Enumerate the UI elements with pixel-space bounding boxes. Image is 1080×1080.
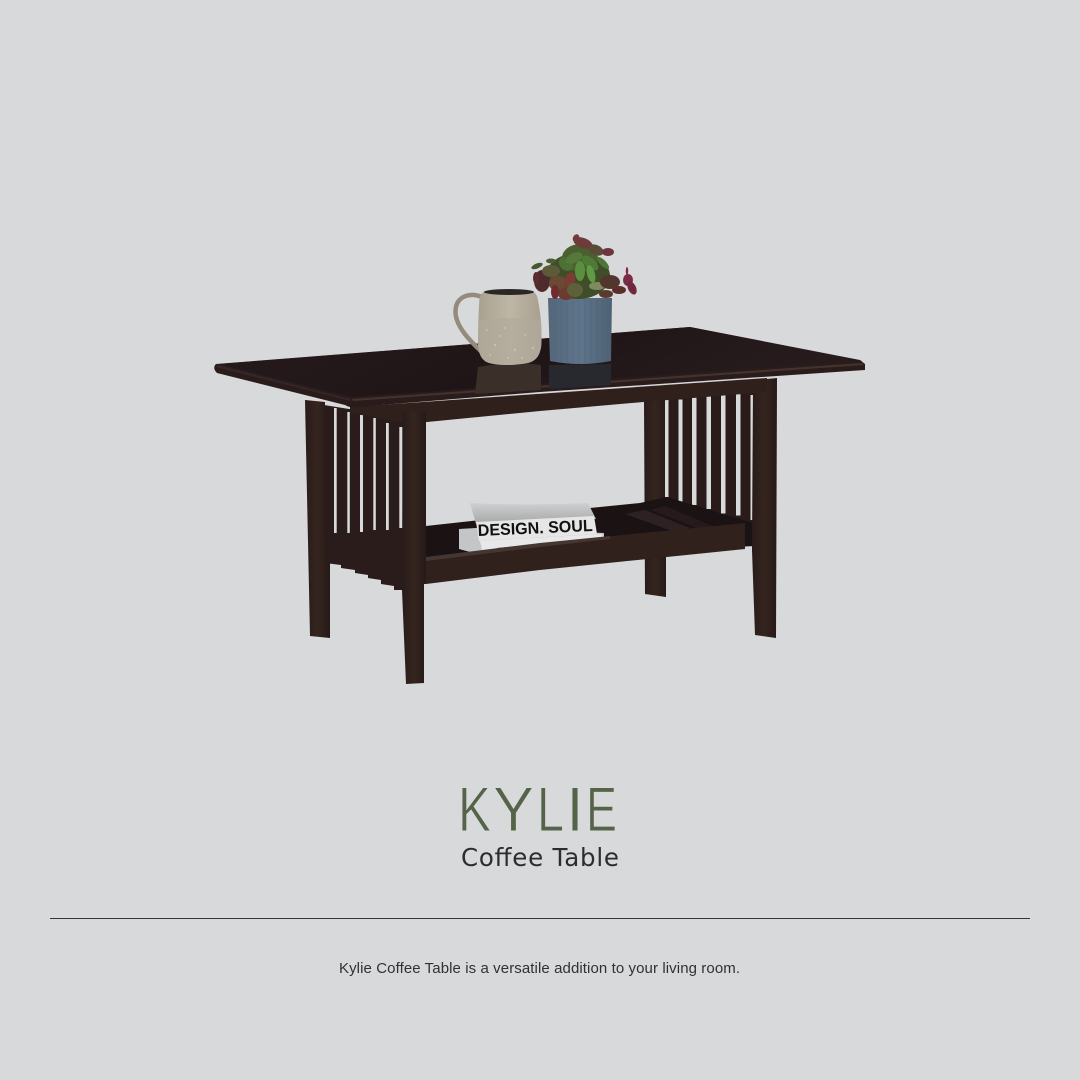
product name: K [458,775,491,845]
front apron [350,378,767,424]
divider [50,918,1030,919]
front right leg [752,378,777,638]
mug reflection [475,363,541,394]
product name [458,775,617,845]
mug handle [455,295,483,353]
product name: I [566,775,584,845]
books on shelf [459,503,604,552]
front left leg [402,411,426,684]
coffee table illustration [214,327,865,684]
plant [531,233,639,300]
back right leg and slat panel [644,385,756,597]
mug body [478,290,542,365]
mug [455,289,542,365]
book title: DESIGN. SOUL [477,517,593,540]
plant pot [548,298,612,364]
product name: L [537,775,564,845]
front rail repaint over books [426,536,610,561]
pot reflection [549,364,611,389]
description: Kylie Coffee Table is a versatile addition to your living room. [339,960,740,977]
product name: E [586,775,617,845]
product name: Y [493,775,534,845]
table top [214,327,865,407]
back left leg and slat panel [305,400,405,638]
lower shelf [426,497,756,584]
product type: Coffee Table [461,843,619,872]
